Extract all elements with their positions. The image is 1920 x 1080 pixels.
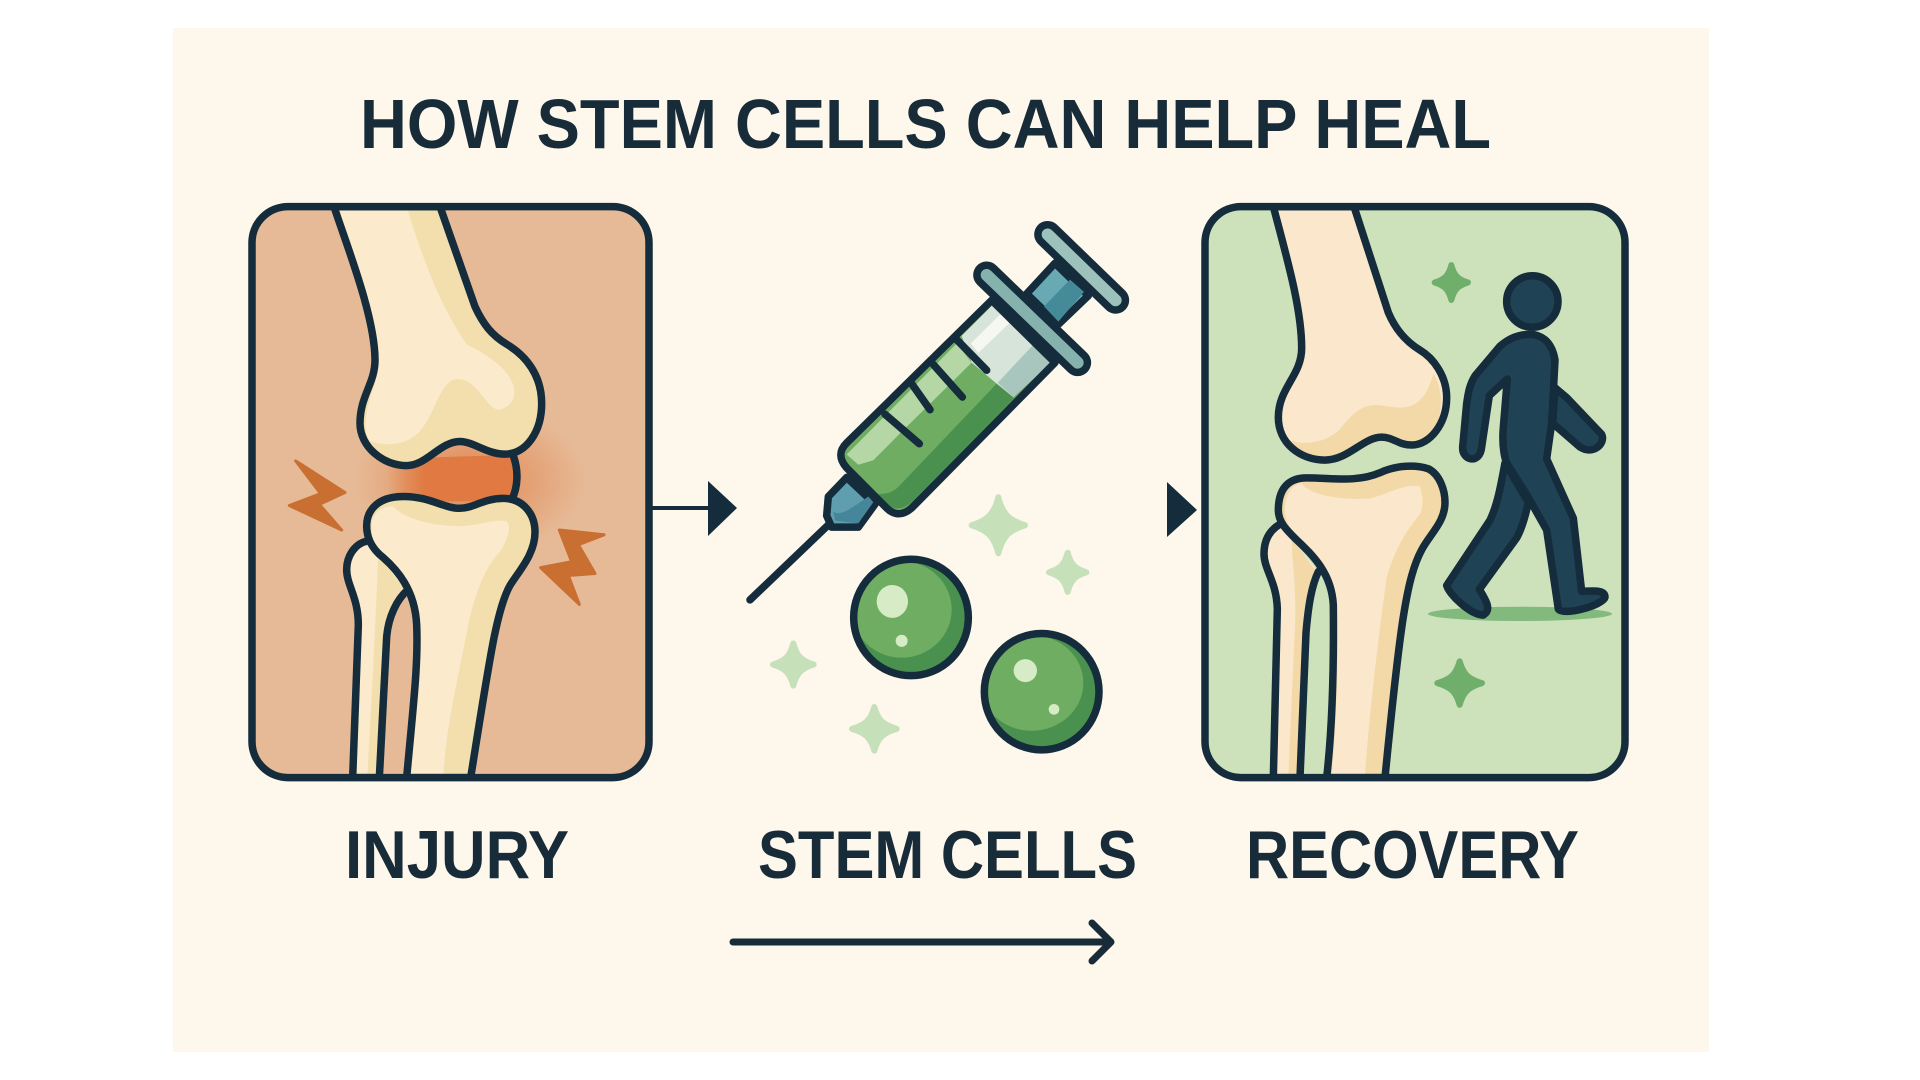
needle hub xyxy=(827,477,875,527)
arrow head: stem cells to recovery xyxy=(1167,482,1197,537)
arrow: injury to stem cells xyxy=(651,481,737,536)
barrel xyxy=(841,300,1055,514)
stem cells and sparkles xyxy=(773,497,1099,751)
inflammation glow xyxy=(367,432,572,530)
fibula xyxy=(1264,524,1318,778)
femur xyxy=(1273,207,1447,460)
icon: pain bolt left xyxy=(289,461,345,530)
joint capsule edge xyxy=(512,456,517,499)
plunger shaft xyxy=(1027,263,1088,324)
barrel tick marks xyxy=(885,340,987,444)
tibia xyxy=(1278,466,1445,778)
inflamed joint space xyxy=(387,455,517,502)
icon: sparkles xyxy=(773,497,1086,751)
needle xyxy=(750,523,830,600)
plunger head xyxy=(1048,234,1116,300)
icon: stem cell one xyxy=(852,559,968,676)
ground shadow xyxy=(1428,607,1612,621)
bottom progress arrow xyxy=(733,923,1111,961)
barrel flange xyxy=(987,275,1078,363)
femur xyxy=(334,207,542,466)
label: recovery: RECOVERY xyxy=(1246,817,1579,893)
label: injury: INJURY xyxy=(345,817,569,893)
icon: syringe xyxy=(750,234,1116,600)
icon: walking person xyxy=(1447,276,1605,615)
icon: sparkle upper xyxy=(1435,265,1468,300)
title: HOW STEM CELLS CAN HELP HEAL xyxy=(360,85,1491,163)
icon: stem cell two xyxy=(980,634,1099,750)
tibia xyxy=(367,496,535,778)
fibula xyxy=(347,541,408,778)
panel: injury xyxy=(252,207,649,778)
panel: recovery xyxy=(1205,207,1625,778)
background panel xyxy=(173,28,1709,1052)
label: stem cells: STEM CELLS xyxy=(758,817,1137,893)
icon: pain bolt right xyxy=(541,530,604,604)
icon: sparkle lower xyxy=(1437,661,1482,705)
